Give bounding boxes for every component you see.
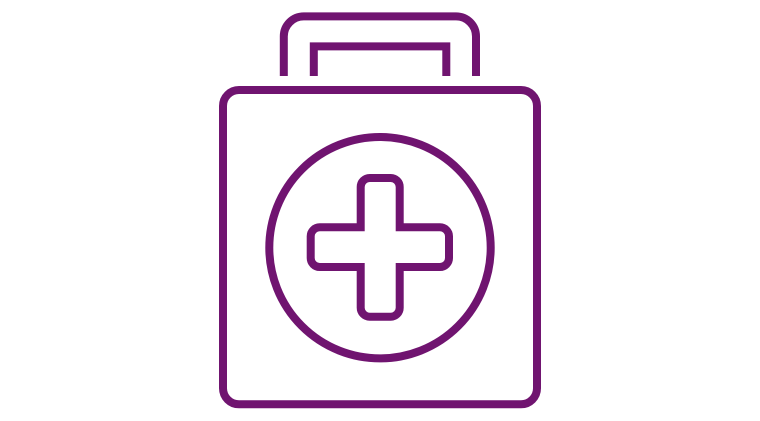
icon: outer handle (284, 16, 476, 76)
icon: inner handle (314, 46, 446, 76)
icon: case body (223, 90, 537, 404)
icon: medical cross (311, 178, 449, 317)
icon: circle emblem (269, 137, 491, 358)
